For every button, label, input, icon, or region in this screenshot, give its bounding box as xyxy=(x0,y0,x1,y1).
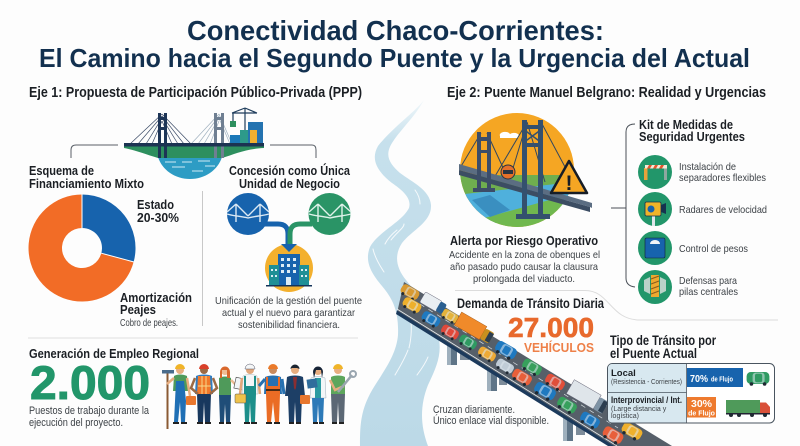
bracket: kit xyxy=(611,124,635,287)
sub-heading: Concesión xyxy=(229,163,351,191)
item: defensas: Defensas para xyxy=(679,275,737,287)
row: local xyxy=(611,368,769,387)
title xyxy=(39,15,750,73)
row: local: (Resistencia - Corrientes) xyxy=(611,379,682,386)
cars xyxy=(399,283,644,446)
icon: Belgrano bridge with warning: ! xyxy=(566,172,572,195)
stat: 2.000 jobs: 2.000 xyxy=(30,356,150,409)
text: jobs description: Puestos de trabajo durante la xyxy=(29,405,149,417)
row: interprovincial xyxy=(611,395,770,420)
item: pesos xyxy=(638,231,748,265)
heading: demanda: Demanda de Tránsito Diaria xyxy=(457,296,604,311)
panel: Eje 1 xyxy=(28,85,362,429)
title: El Camino hacia el Segundo Puente y la Urgencia del Actual xyxy=(39,43,750,73)
stat: 27.000 vehicles: 27.000 xyxy=(508,312,594,343)
text: cruzan: Cruzan diariamente. xyxy=(433,404,515,416)
row: local: Local xyxy=(611,368,636,379)
item: radares xyxy=(638,192,767,226)
elevated road with traffic xyxy=(396,282,672,446)
worker 2 xyxy=(191,364,217,424)
label: Amortización: Peajes xyxy=(120,303,156,317)
heading: kit: Kit de Medidas de xyxy=(639,117,733,132)
text: concession description: Unificación de la gestión del puente xyxy=(215,295,362,307)
row: interprovincial: de Flujo xyxy=(688,410,715,418)
curved divider xyxy=(455,290,778,320)
title: Conectividad Chaco-Corrientes: xyxy=(187,15,604,46)
heading: kit: Seguridad Urgentes xyxy=(639,129,745,144)
row: local: de Flujo xyxy=(711,374,733,384)
heading: tipo de tránsito: Tipo de Tránsito por xyxy=(610,333,717,348)
table: traffic type xyxy=(608,364,774,423)
item: radares: Radares de velocidad xyxy=(679,204,767,216)
label: Estado: 20-30% xyxy=(137,211,179,225)
row: interprovincial: logística) xyxy=(611,413,639,420)
item: defensas: pilas centrales xyxy=(679,286,738,298)
text: alerta xyxy=(449,234,600,285)
item: separadores: separadores flexibles xyxy=(679,172,766,184)
text: alerta: año pasado pudo causar la clausura xyxy=(450,261,598,273)
orange truck xyxy=(454,312,495,345)
worker 7 xyxy=(306,366,326,424)
icon: cable-stayed bridge with city xyxy=(124,108,264,179)
text: alerta: prolongada del viaducto. xyxy=(473,273,575,285)
heading: tipo de tránsito: el Puente Actual xyxy=(610,346,697,361)
bracket: left xyxy=(71,145,118,158)
label: Amortización: Cobro de peajes. xyxy=(120,317,178,329)
row: interprovincial: Interprovincial / Int. xyxy=(611,395,682,406)
sub-heading: Concesión: Unidad de Negocio xyxy=(239,176,340,191)
heading: kit xyxy=(639,117,745,144)
row: interprovincial: (Large distancia y xyxy=(611,406,667,413)
river xyxy=(360,100,440,446)
text: cruzan xyxy=(433,404,549,427)
label: Estado xyxy=(137,198,179,225)
text: alerta: Alerta por Riesgo Operativo xyxy=(450,234,598,248)
text: cruzan: Único enlace vial disponible. xyxy=(433,414,549,427)
text: jobs description xyxy=(29,405,149,429)
heading: tipo de tránsito xyxy=(610,333,717,361)
worker 6 xyxy=(285,364,310,424)
label: Amortización: Amortización xyxy=(120,291,192,305)
text: concession description: actual y el nuevo para garantizar xyxy=(222,307,355,319)
row: interprovincial: 30% xyxy=(691,398,713,410)
worker 8 xyxy=(330,364,356,424)
worker 5 xyxy=(259,364,284,424)
bracket: right xyxy=(270,145,316,158)
stat: 27.000 vehicles: VEHÍCULOS xyxy=(524,340,594,355)
item: separadores xyxy=(638,155,766,189)
road deck xyxy=(397,282,672,446)
worker 3 xyxy=(219,366,245,424)
label: Amortización xyxy=(120,291,192,329)
text: concession description: sostenibilidad financiera. xyxy=(238,319,340,331)
white van xyxy=(420,292,447,315)
worker 1 xyxy=(162,364,196,429)
heading: Eje 1: Eje 1: Propuesta de Participación Público-Privada (PPP) xyxy=(29,85,362,101)
river highlights xyxy=(373,190,428,375)
road pillars xyxy=(447,342,585,441)
heading: empleo: Generación de Empleo Regional xyxy=(29,347,199,361)
sub-heading: Esquema: Esquema de xyxy=(29,163,94,178)
text: concession description xyxy=(215,295,362,331)
item: pesos: Control de pesos xyxy=(679,243,748,255)
row: local: 70% xyxy=(690,373,709,385)
item: separadores: Instalación de xyxy=(679,161,736,173)
sub-heading: Esquema: Financiamiento Mixto xyxy=(29,176,144,191)
text: alerta: Accidente en la zona de obenques el xyxy=(449,249,600,261)
sub-heading: Esquema xyxy=(29,163,144,191)
icon: unified concession diagram xyxy=(227,193,351,292)
gray truck xyxy=(566,380,610,414)
label: Estado: Estado xyxy=(137,198,174,212)
item: defensas xyxy=(638,270,738,304)
icon: row of workers xyxy=(162,364,356,429)
donut chart: financing xyxy=(29,194,136,302)
text: jobs description: ejecución del proyecto. xyxy=(29,417,123,429)
icon: Belgrano bridge with warning xyxy=(455,113,592,227)
panel: Eje 2 xyxy=(396,85,778,446)
sub-heading: Concesión: Concesión como Única xyxy=(229,163,351,178)
worker 4 xyxy=(235,364,260,424)
